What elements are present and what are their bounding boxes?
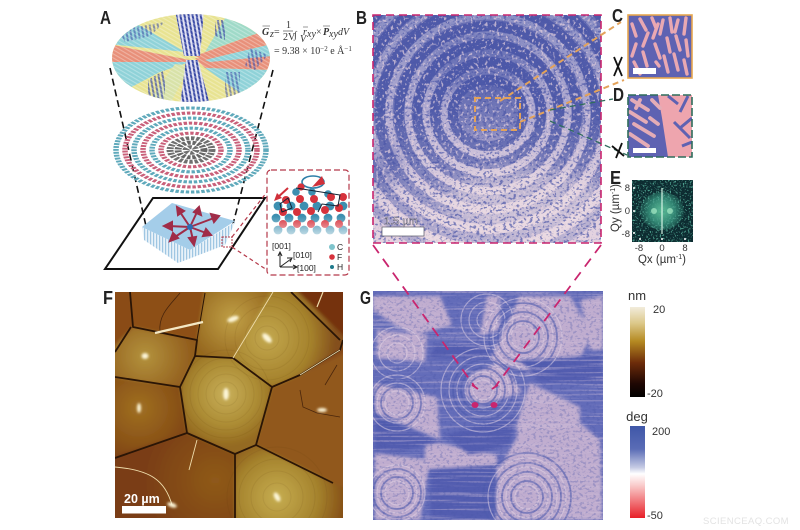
equation: r [303,27,307,38]
domain ring systems [369,294,566,530]
x ticks: -8 [635,243,643,254]
panel F: AFM topography [104,291,343,518]
film with pillars [142,203,235,263]
panel D: zoomed map [613,85,692,157]
equation: −1 [344,45,352,53]
D image [628,95,692,157]
growth rings [198,304,304,518]
label B: B [356,8,367,28]
tick dots [633,187,686,240]
equation: −2 [320,45,328,53]
equation: e Å [328,45,345,57]
center of arrows [187,224,193,230]
x ticks: 8 [682,243,688,254]
axes [278,252,297,269]
color bar: deg: -50 [647,510,663,522]
inset connector lines [232,192,267,270]
color bar: deg: deg [626,409,648,424]
equation: = [274,27,280,38]
axis labels: [100] [297,263,316,273]
label A: A [100,8,111,28]
fold line [155,322,203,333]
equation: G [262,27,270,38]
color bar: deg: 200 [652,426,670,438]
label G: G [360,288,371,308]
panel E: Fourier transform [610,168,693,266]
axis labels: [001] [272,241,291,251]
concentric domain rings [373,15,601,243]
equation: xy [328,29,338,40]
axis break marks [612,57,624,158]
x ticks: 0 [659,243,665,254]
selection box and connectors for C [475,22,624,130]
y ticks: -8 [622,229,630,240]
Qy axis label: Qy (µm [610,194,622,232]
selected region marker [222,237,232,247]
bright centers [137,315,327,509]
Qx axis label: Qx (µm [638,254,676,266]
color bar: nm [628,288,665,400]
equation: = 9.38 × 10 [274,46,320,57]
FFT image [632,180,693,242]
color bar: nm: -20 [647,388,663,400]
substrate outline [105,198,265,269]
grain boundaries [115,292,343,518]
D scale bar [633,148,656,153]
thin cracks [160,293,340,417]
Qx axis label: -1 [676,254,682,261]
watermark: SCIENCEAQ.COM [703,516,789,527]
y ticks [622,183,630,240]
F scale bar [122,492,166,514]
equation: V [300,34,308,45]
inset: crystal structure [267,170,349,275]
equation: z [269,29,274,40]
Qy axis label: -1 [610,188,617,194]
F scale bar: 20 µm [124,492,160,506]
panel A: polar texture schematic [100,8,352,275]
top disk: polarization domains [112,14,270,102]
y ticks: 0 [625,206,630,217]
equation: × [316,27,322,38]
atom legend: F [337,252,342,262]
equation: dV [338,27,351,38]
scale bar [382,216,424,236]
Qy axis label: ) [610,184,622,188]
dashed frame [373,15,601,243]
D frame [628,95,692,157]
label C: C [612,6,623,26]
atom legend [329,242,343,272]
Qx axis label: ) [682,254,686,266]
C scale bar [633,68,656,74]
x ticks [635,243,688,254]
rotation arrow [274,176,325,201]
equation: P [323,27,330,38]
atom legend: C [337,242,343,252]
equation: 2V [283,32,296,43]
panel C: zoomed map [612,6,692,78]
label F: F [103,288,113,308]
phase image [369,291,603,530]
topography image [115,292,343,518]
color bar: nm: nm [628,288,646,303]
C image [628,15,692,78]
y ticks: 8 [625,183,630,194]
light ridges [115,292,340,505]
middle disk: concentric molecule rings [116,108,266,192]
panel G: large-area PFM phase map [360,288,603,530]
equation: ∫ [293,30,298,41]
color bar: nm: 20 [653,304,665,316]
zoom guide dashed lines [110,68,273,226]
radial polarization arrows [164,207,219,245]
color bar: deg [626,409,670,522]
equation: 1 [286,20,291,31]
panel B: large PFM map [357,11,602,244]
scale bar: 1.5 µm [384,216,418,228]
label E: E [610,168,621,188]
connectors for D [550,99,627,155]
atoms lattice [272,183,348,234]
axis labels [272,241,316,273]
equation: xy [306,29,316,40]
label D: D [613,85,624,105]
C frame [628,15,692,78]
axis labels: [010] [293,250,312,260]
atom legend: H [337,262,343,272]
connector B to G [373,245,601,408]
equation [262,20,352,57]
